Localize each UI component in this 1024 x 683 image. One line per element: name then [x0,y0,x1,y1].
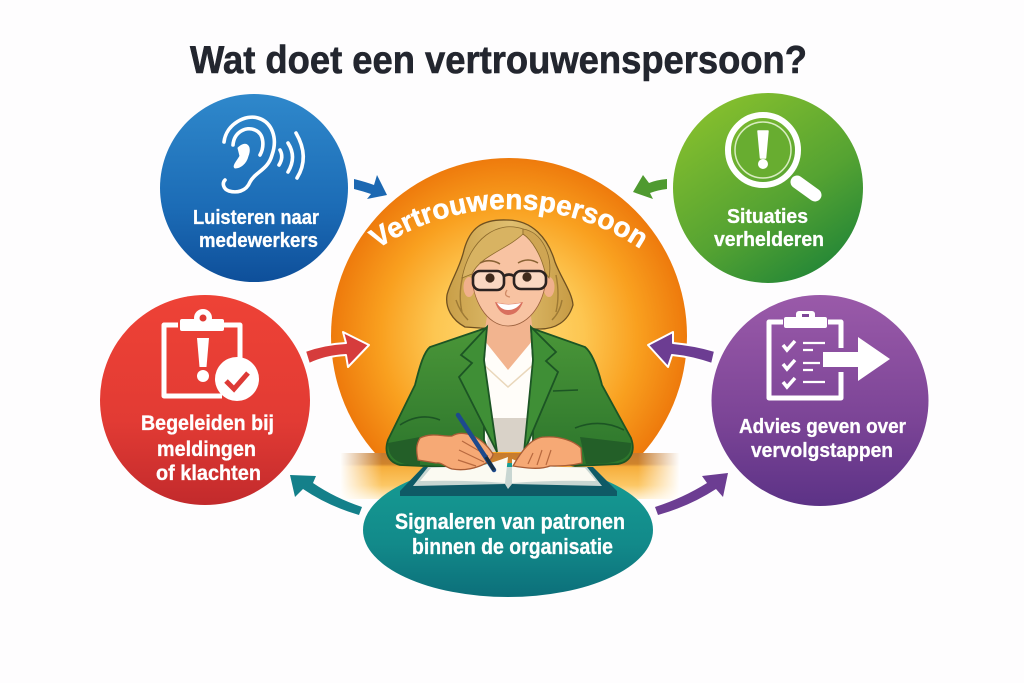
arrow: purple upper [648,332,715,367]
panel: advies [712,295,928,506]
ears [464,277,474,297]
text: Advies geven over vervolgstappen: Advies geven over [739,416,906,438]
board and book [400,467,617,496]
neck [483,316,534,372]
glasses [473,271,546,290]
panel: luisteren [160,94,348,282]
title: Wat doet een vertrouwenspersoon? [190,39,807,82]
panel: begeleiden [100,295,310,505]
right hand [513,437,582,468]
text: Luisteren naar medewerkers [193,207,319,252]
text: Advies geven over vervolgstappen [739,416,906,462]
icon: checklist with arrow [769,311,890,398]
panel: central orange circle [331,158,687,453]
arrow: teal [290,475,362,515]
figure: confidential adviser [386,220,633,496]
pen [458,415,494,470]
text: Luisteren naar medewerkers: Luisteren naar [193,207,319,229]
arrow: purple lower [655,473,728,515]
jacket [386,328,490,467]
text: Signaleren van patronen binnen de organisatie [395,509,625,559]
text: Begeleiden bij meldingen of klachten: of klachten [156,462,261,485]
shirt [484,340,533,450]
icon: magnifying glass [728,115,815,195]
text: Advies geven over vervolgstappen: vervolgstappen [751,440,893,462]
panel: situaties [673,93,863,283]
text: Luisteren naar medewerkers: medewerkers [199,230,318,252]
text: Signaleren van patronen binnen de organisatie: binnen de organisatie [412,534,613,559]
arrow: green [633,175,667,199]
text: Begeleiden bij meldingen of klachten [141,412,274,485]
hair back [447,220,573,329]
hair fringe [462,227,523,278]
panel: teal oval [363,463,653,597]
desk [340,453,680,499]
text: Begeleiden bij meldingen of klachten: Begeleiden bij [141,412,274,435]
arrow: red [305,332,369,367]
text: Situaties verhelderen: Situaties [727,206,808,228]
arrow: blue [354,175,387,199]
text: Signaleren van patronen binnen de organisatie: Signaleren van patronen [395,509,625,534]
icon: ear [223,117,303,192]
icon: clipboard with check [164,309,259,401]
face [472,232,546,326]
left arm hand [417,433,493,470]
eyes [485,273,495,283]
text: Situaties verhelderen: verhelderen [714,229,824,251]
text: Situaties verhelderen [714,206,824,251]
text: Begeleiden bij meldingen of klachten: meldingen [157,438,256,461]
heading: Vertrouwenspersoon: Vertrouwenspersoon [367,194,646,248]
mouth [495,302,523,315]
